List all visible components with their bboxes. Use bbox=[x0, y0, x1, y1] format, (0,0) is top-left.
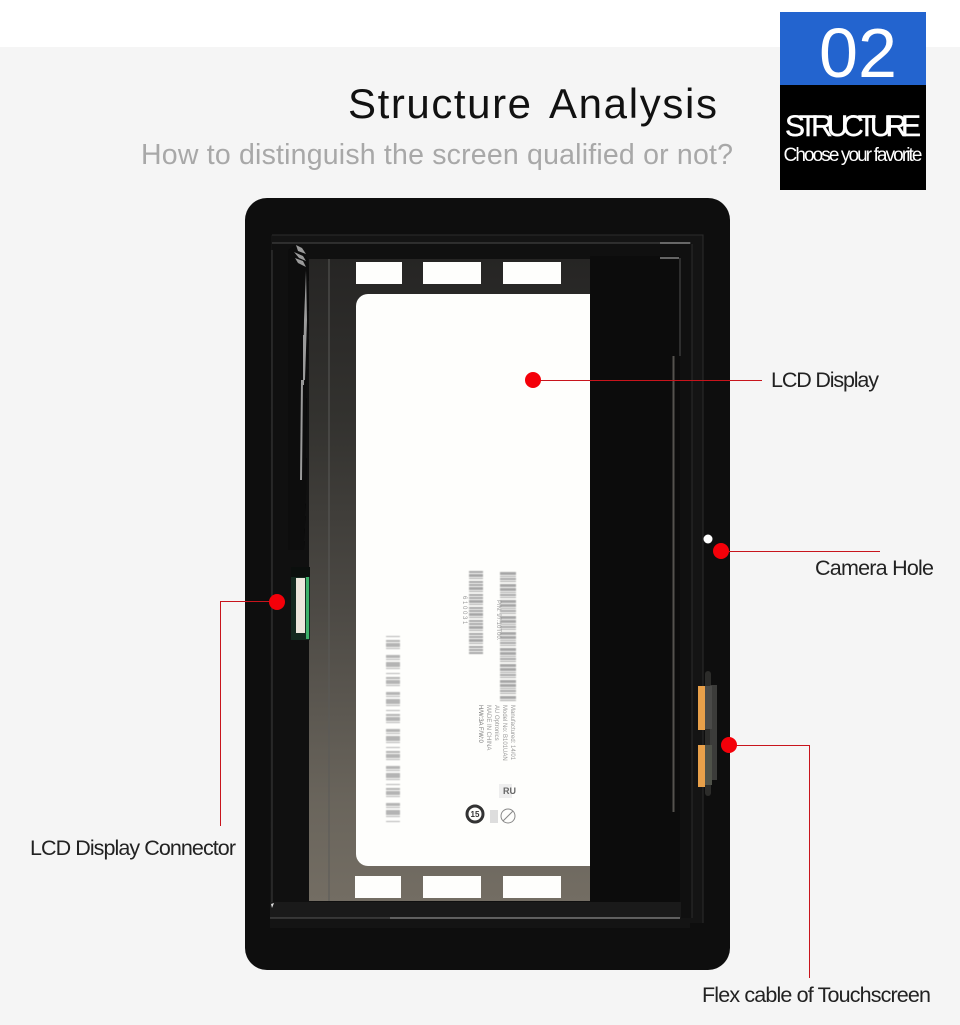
title: Analysis bbox=[549, 80, 717, 127]
callout: Flex cable of Touchscreen bbox=[702, 737, 931, 1007]
metal frame back plate bbox=[309, 259, 590, 901]
callout: Flex cable of Touchscreen: Flex cable of Touchscreen bbox=[702, 983, 931, 1007]
title bbox=[348, 80, 717, 127]
LCD connector bbox=[291, 567, 310, 640]
title: Structure bbox=[348, 80, 531, 127]
callout: Camera Hole bbox=[713, 543, 934, 580]
right vertical seam bbox=[672, 356, 674, 812]
inner film layers bbox=[270, 235, 703, 928]
camera hole bbox=[704, 534, 712, 544]
callout: LCD Display Connector bbox=[30, 594, 285, 860]
label small print: MADE IN CHINA bbox=[485, 705, 491, 750]
label small print bbox=[461, 596, 515, 761]
section badge: Choose your favorite bbox=[784, 145, 922, 166]
section badge: 02 bbox=[819, 14, 897, 92]
label small print: H/W:3A F/W:0 bbox=[477, 705, 483, 743]
right panel top edge highlights bbox=[660, 243, 690, 258]
callout: LCD Display: LCD Display bbox=[771, 368, 879, 392]
black glass bezel bbox=[245, 198, 730, 970]
cert marks bbox=[467, 784, 516, 823]
label small print: Model No: B101UAN bbox=[501, 705, 507, 761]
tape edge on left bbox=[288, 245, 309, 550]
cert marks: 15 bbox=[471, 810, 480, 819]
callout: LCD Display bbox=[525, 368, 879, 392]
cert marks: RU bbox=[503, 786, 516, 796]
callout: Camera Hole: Camera Hole bbox=[815, 556, 934, 580]
subtitle: How to distinguish the screen qualified or not? bbox=[141, 139, 733, 171]
barcodes on label bbox=[393, 571, 508, 825]
tablet screen product photo bbox=[245, 198, 730, 970]
section badge bbox=[780, 12, 926, 190]
label small print: Manufactured: 14/01 bbox=[509, 705, 515, 761]
label small print: P/N: 97.10T00. bbox=[495, 600, 501, 641]
bottom windows bbox=[355, 876, 561, 898]
top windows bbox=[356, 262, 561, 284]
callout: LCD Display Connector: LCD Display Connector bbox=[30, 836, 236, 860]
white backlight panel bbox=[356, 294, 590, 866]
section badge: STRUCTURE bbox=[785, 110, 921, 143]
right black panel bbox=[590, 256, 680, 902]
touchscreen flex cables bbox=[698, 671, 717, 796]
label small print: 6 1 0 0 3 1 bbox=[461, 596, 467, 625]
label small print: AU Optronics bbox=[493, 705, 499, 741]
